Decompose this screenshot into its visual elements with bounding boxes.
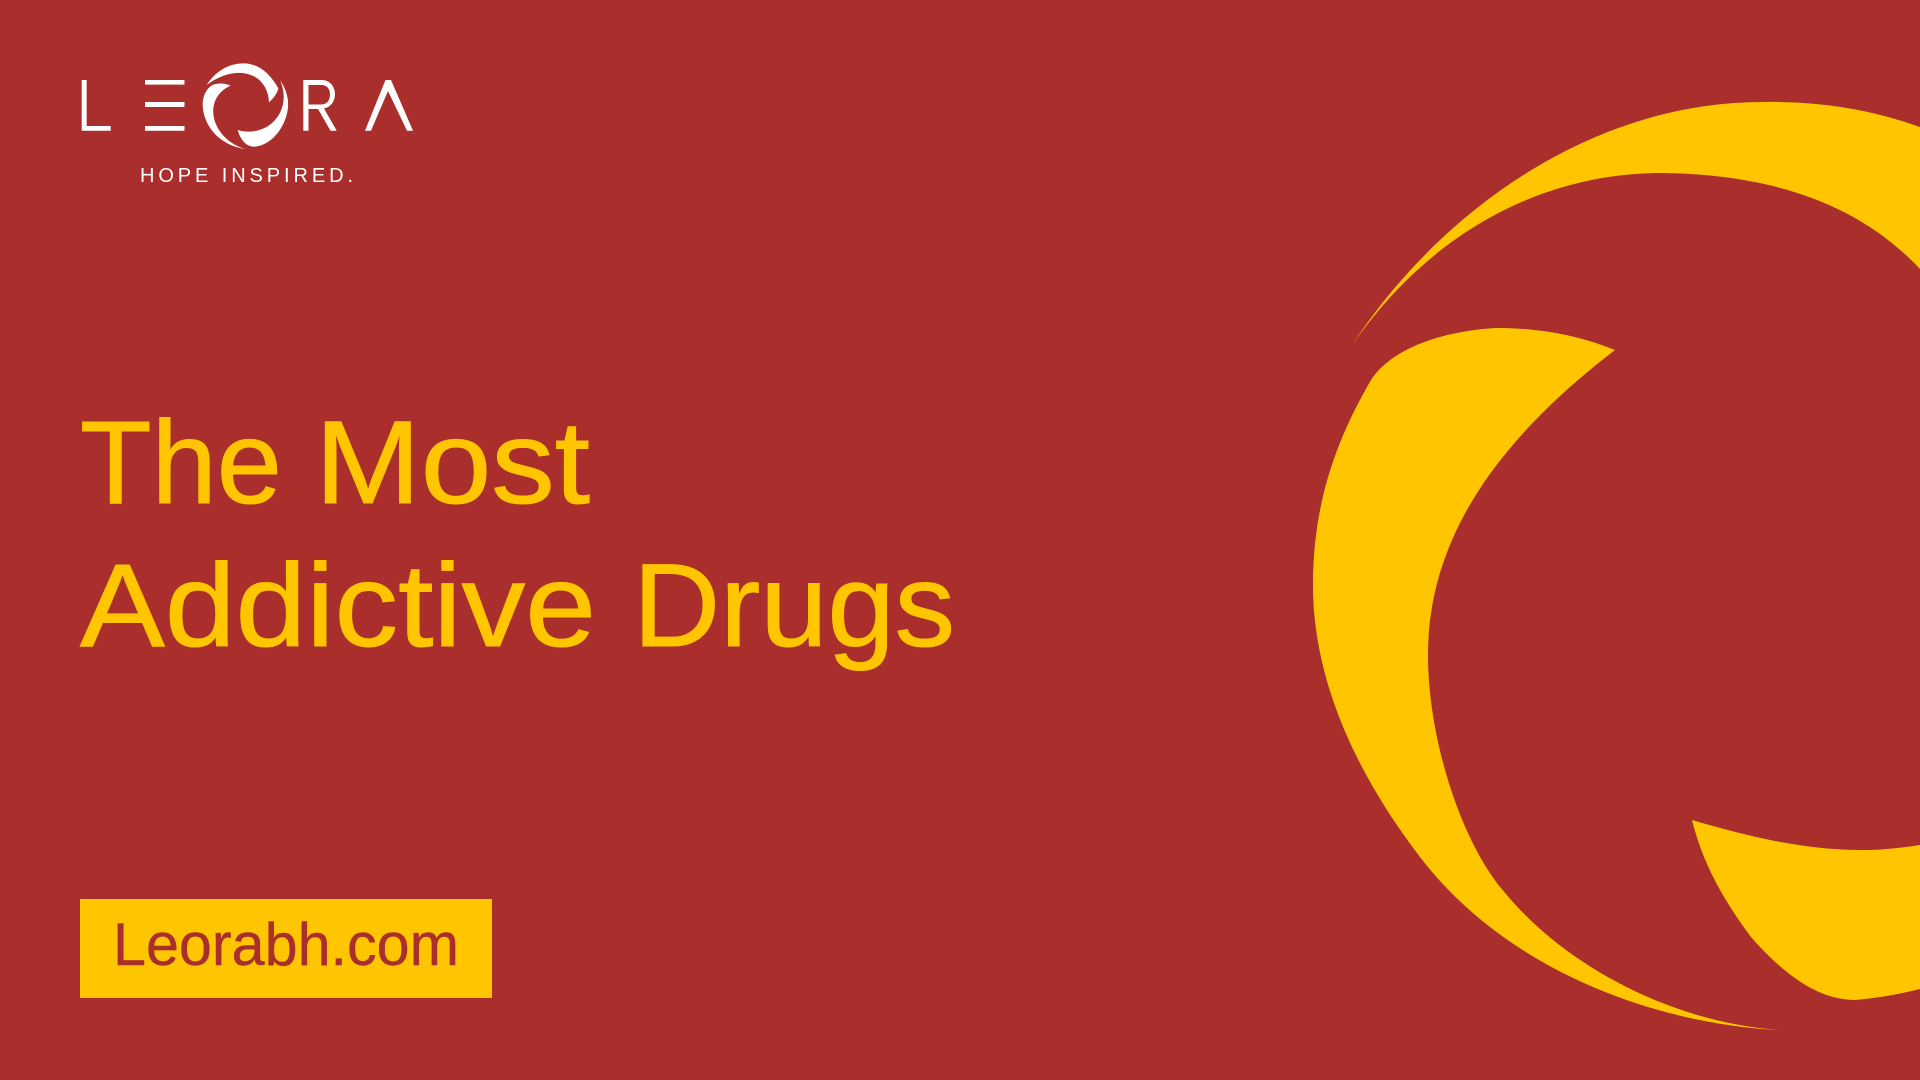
letter L (82, 80, 111, 131)
website button (80, 899, 492, 998)
button background (80, 899, 492, 998)
emblem: left crescent (1313, 328, 1779, 1030)
emblem: top swoosh (1353, 102, 1920, 344)
emblem: bottom crescent (1692, 820, 1920, 1000)
title line 2: Addictive (80, 540, 596, 672)
logo tagline: HOPE INSPIRED. (140, 165, 353, 187)
title (80, 397, 955, 672)
title line 1: Most (315, 397, 590, 529)
letter A (365, 80, 413, 131)
title line 1: The (80, 397, 282, 529)
letter R (303, 80, 337, 131)
button label: Leorabh.com (113, 911, 459, 978)
logo wordmark letters (82, 80, 413, 131)
letter E (145, 80, 184, 131)
large emblem graphic (1313, 102, 1920, 1030)
logo (82, 63, 413, 187)
title line 2: Drugs (633, 540, 955, 672)
logo emblem (203, 63, 288, 149)
